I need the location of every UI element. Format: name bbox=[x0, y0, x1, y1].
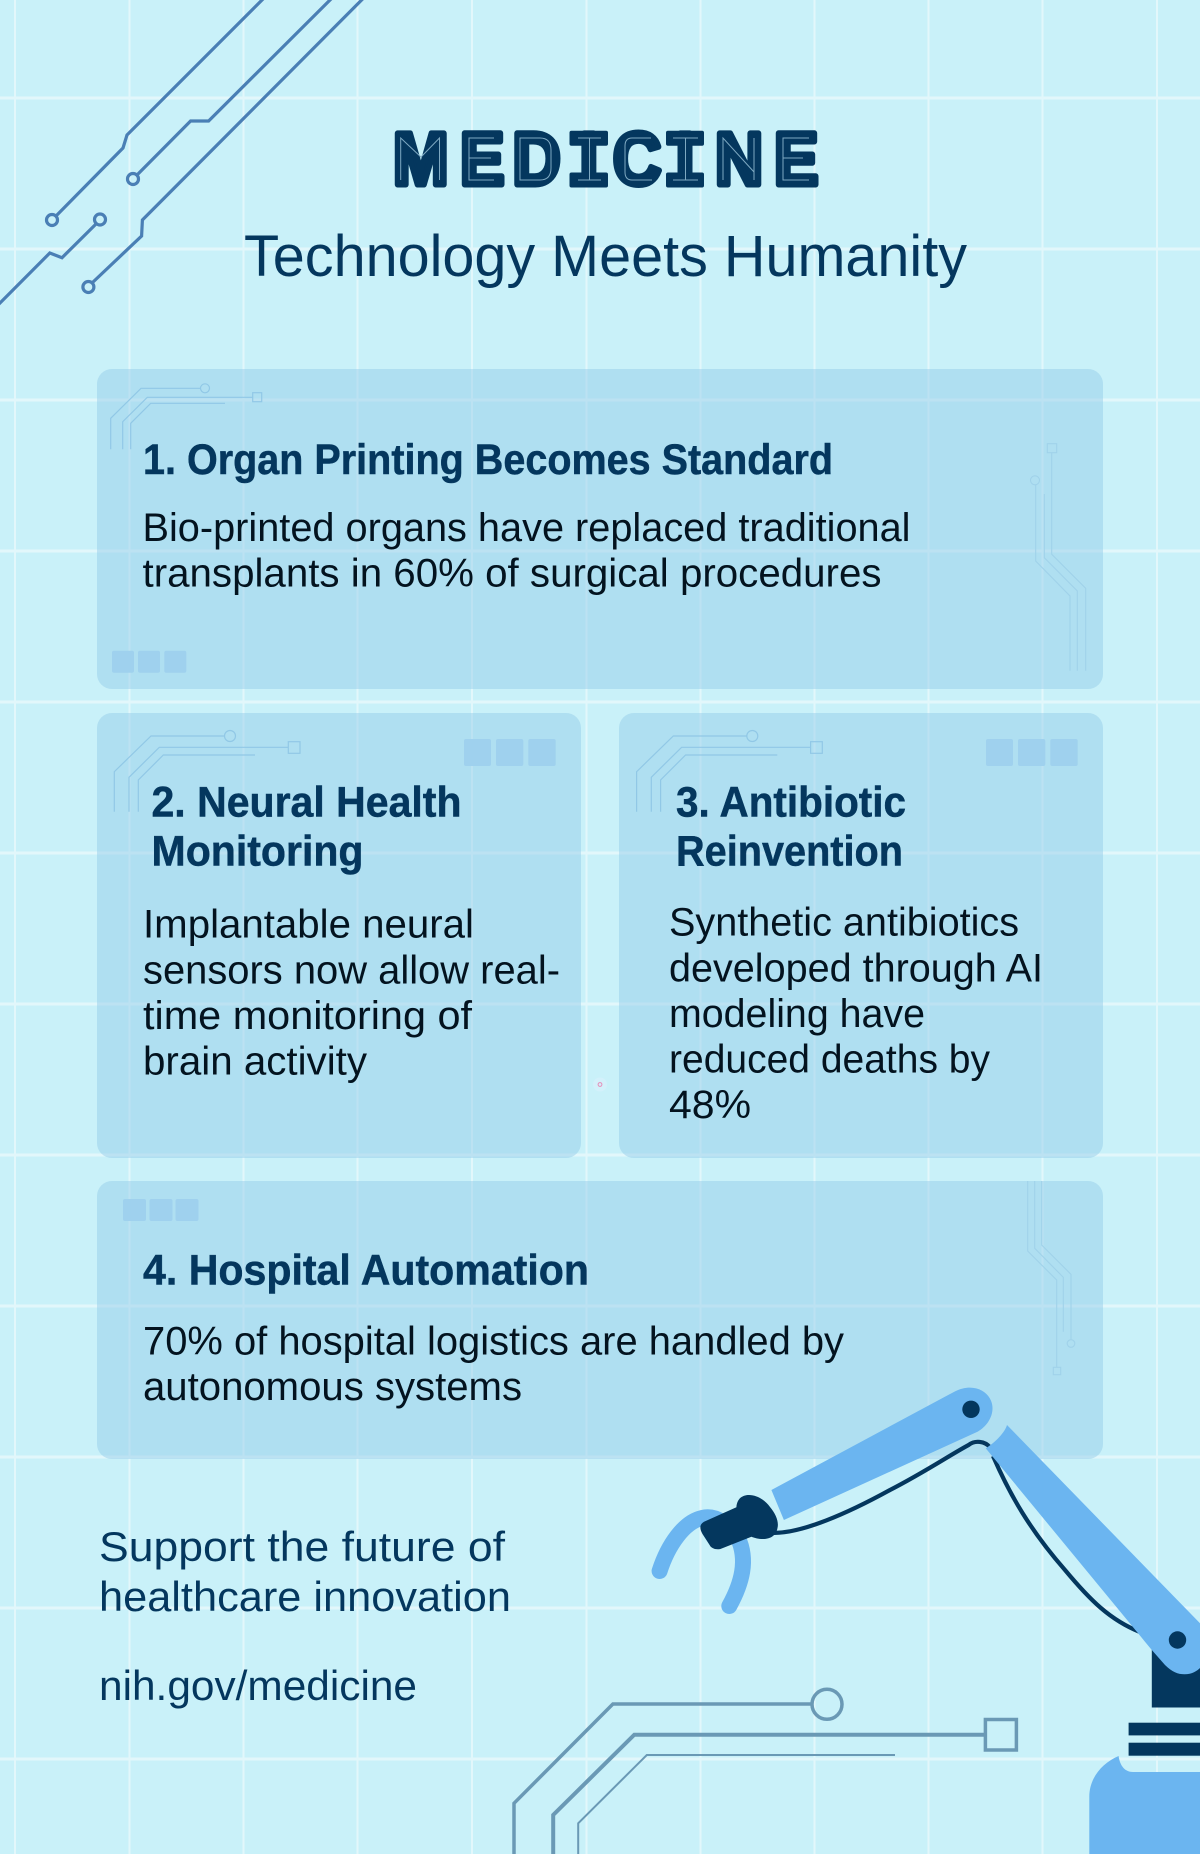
heading: card 3 bbox=[676, 779, 906, 876]
body: card 4: 70% of hospital logistics are handled by bbox=[143, 1319, 844, 1363]
body: card 3: 48% bbox=[669, 1083, 751, 1127]
body: card 2: brain activity bbox=[143, 1040, 367, 1084]
robot lower arm bbox=[986, 1425, 1200, 1674]
body: card 3: modeling have bbox=[669, 992, 925, 1036]
squares: card 1 bbox=[112, 651, 186, 673]
circuit decoration: card 2 bbox=[114, 730, 300, 812]
circuit decoration: card 4 right bbox=[1028, 1181, 1075, 1375]
body: card 1 bbox=[142, 506, 910, 596]
heading: card 2: 2. Neural Health bbox=[152, 779, 462, 827]
squares: card 3 bbox=[986, 739, 1078, 766]
body: card 2: time monitoring of bbox=[143, 994, 473, 1038]
robot wires bbox=[770, 1442, 1140, 1632]
title: MEDICINE bbox=[393, 117, 818, 200]
body: card 3: Synthetic antibiotics bbox=[669, 901, 1019, 945]
panel: organ printing bbox=[97, 369, 1103, 689]
body: card 2: sensors now allow real- bbox=[143, 948, 560, 992]
body: card 1: transplants in 60% of surgical procedures bbox=[142, 552, 882, 596]
robot arm illustration bbox=[660, 1388, 1200, 1854]
subtitle: Technology Meets Humanity bbox=[244, 224, 967, 289]
heading: card 1: 1. Organ Printing Becomes Standard bbox=[143, 436, 833, 484]
body: card 4: autonomous systems bbox=[143, 1365, 522, 1409]
body: card 1: Bio-printed organs have replaced traditional bbox=[142, 506, 910, 550]
squares: card 4 bbox=[123, 1199, 198, 1221]
body: card 3: reduced deaths by bbox=[669, 1037, 990, 1081]
panel: neural health monitoring bbox=[97, 713, 581, 1158]
heading: card 3: Reinvention bbox=[676, 828, 903, 876]
call to action: nih.gov/medicine bbox=[99, 1662, 417, 1709]
circuit lines: top left corner bbox=[0, 0, 364, 305]
body: card 2: Implantable neural bbox=[143, 903, 474, 947]
heading: card 4: 4. Hospital Automation bbox=[143, 1246, 589, 1294]
squares: card 2 bbox=[464, 739, 556, 766]
body: card 3: developed through AI bbox=[669, 947, 1043, 991]
robot base bbox=[1089, 1645, 1200, 1854]
body: card 4 bbox=[143, 1319, 844, 1409]
heading: card 3: 3. Antibiotic bbox=[676, 779, 906, 827]
circuit lines: bottom bbox=[514, 1689, 1016, 1854]
panel: antibiotic reinvention bbox=[619, 713, 1103, 1158]
call to action bbox=[99, 1523, 511, 1709]
robot gripper bbox=[660, 1495, 778, 1606]
call to action: healthcare innovation bbox=[99, 1573, 511, 1620]
circuit decoration: card 1 right bbox=[1030, 444, 1086, 671]
body: card 3 bbox=[669, 901, 1043, 1127]
circuit decoration: card 1 top left bbox=[111, 384, 262, 449]
circuit decoration: card 3 bbox=[637, 730, 822, 812]
body: card 2 bbox=[143, 903, 560, 1084]
call to action: Support the future of bbox=[99, 1523, 505, 1570]
marker: pink dot bbox=[593, 1078, 607, 1092]
robot upper arm bbox=[771, 1388, 992, 1520]
heading: card 2 bbox=[152, 779, 462, 876]
panel: hospital automation bbox=[97, 1181, 1103, 1459]
heading: card 2: Monitoring bbox=[152, 828, 364, 876]
